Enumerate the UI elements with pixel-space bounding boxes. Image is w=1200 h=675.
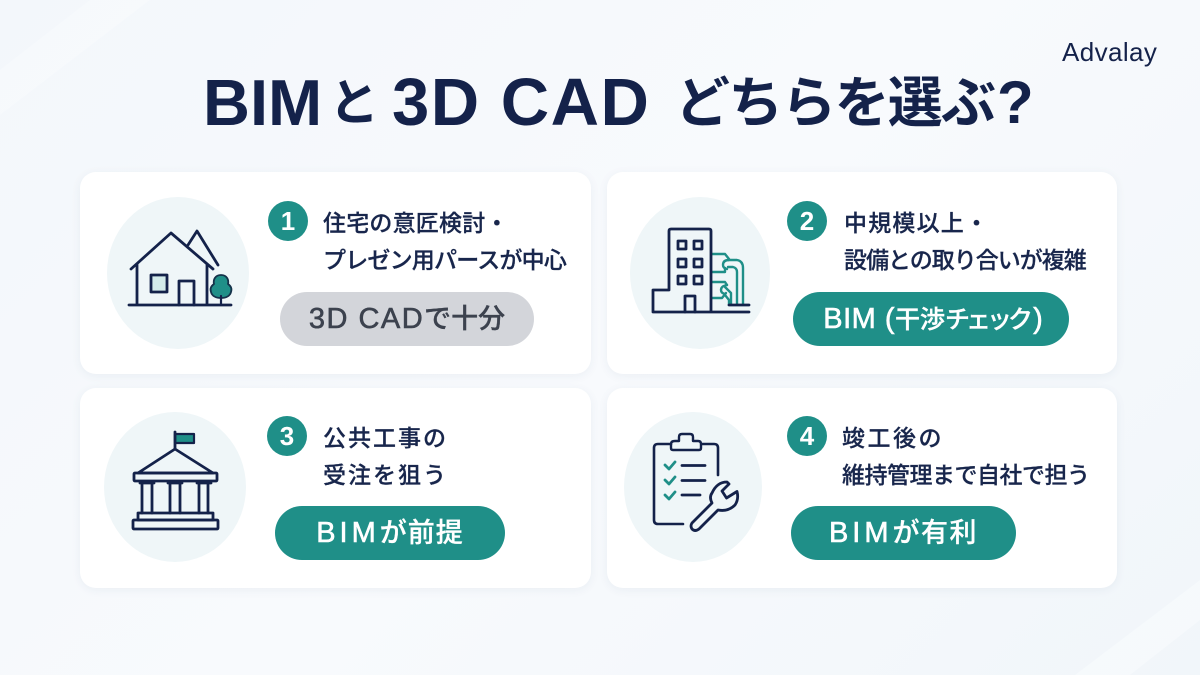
verdict pill 2: BIM (干渉チェック): [823, 303, 1043, 335]
text: item 4: 維持管理まで自社で担う: [842, 462, 1090, 488]
badge 2: [787, 201, 827, 241]
badge 1: 1: [281, 206, 295, 236]
badge 1: [268, 201, 308, 241]
title: BIM: [203, 66, 322, 139]
title: [203, 65, 1034, 140]
verdict pill 2: [793, 292, 1069, 346]
text: item 4: 竣工後の: [842, 425, 944, 451]
icon: building with pipes: [630, 197, 770, 349]
title: ?: [997, 69, 1034, 136]
icon: clipboard and wrench: [624, 412, 762, 562]
text: item 2: [844, 210, 1086, 273]
title: と: [329, 75, 379, 131]
panel: card 2: [607, 172, 1117, 374]
verdict pill 4: [791, 506, 1016, 560]
panel: card 3: [80, 388, 591, 588]
verdict pill 3: BIMが前提: [316, 517, 464, 549]
text: item 4: [842, 425, 1090, 488]
verdict pill 1: 3D CADで十分: [309, 303, 505, 335]
text: item 3: [323, 425, 448, 488]
badge 4: 4: [800, 421, 814, 451]
icon: house: [107, 197, 249, 349]
badge 4: [787, 416, 827, 456]
text: item 3: 受注を狙う: [323, 462, 448, 488]
title: どちらを選ぶ: [675, 72, 994, 134]
text: item 1: [323, 210, 567, 273]
icon: public building: [104, 412, 246, 562]
badge 2: 2: [800, 206, 814, 236]
panel: card 4: [607, 388, 1117, 588]
verdict pill 4: BIMが有利: [829, 517, 978, 549]
badge 3: [267, 416, 307, 456]
text: item 1: 住宅の意匠検討・: [323, 210, 509, 236]
badge 3: 3: [280, 421, 294, 451]
verdict pill 3: [275, 506, 505, 560]
text: item 3: 公共工事の: [323, 425, 448, 451]
panel: card 1: [80, 172, 591, 374]
brand logo: Advalay: [1062, 37, 1157, 67]
text: item 2: 設備との取り合いが複雑: [844, 247, 1086, 273]
title: 3D CAD: [392, 65, 650, 140]
text: item 1: プレゼン用パースが中心: [323, 247, 566, 273]
text: item 2: 中規模以上・: [844, 210, 989, 236]
verdict pill 1: [280, 292, 534, 346]
